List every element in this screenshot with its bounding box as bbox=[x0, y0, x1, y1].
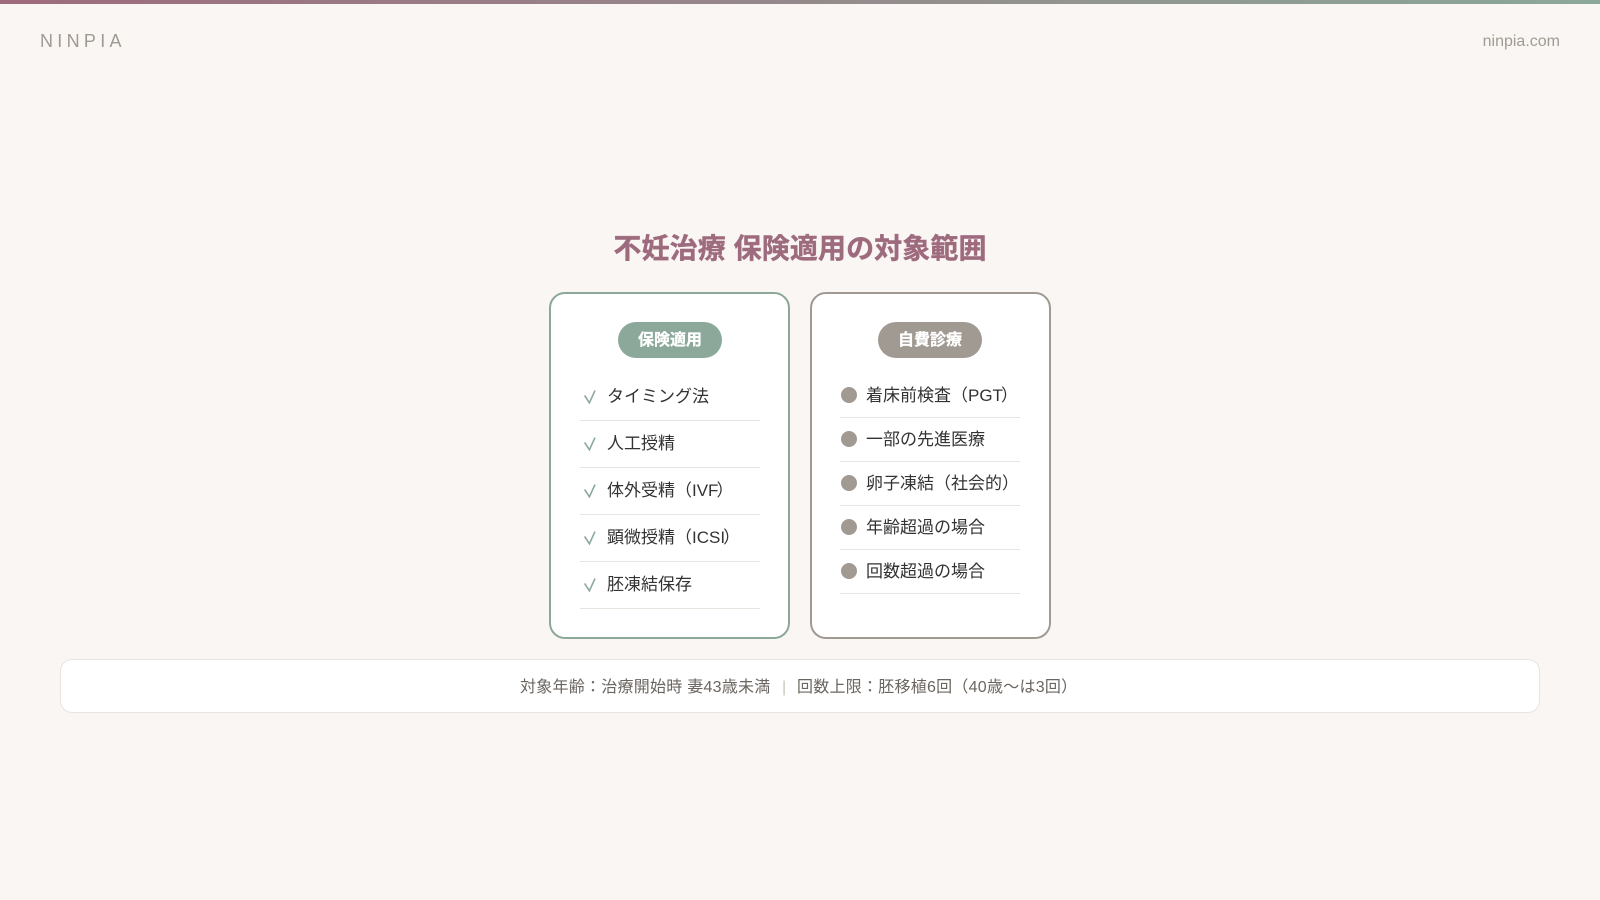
site url: ninpia.com bbox=[1483, 33, 1560, 50]
panel: insurance covered bbox=[549, 292, 790, 639]
item: artificial insemination: 人工授精 bbox=[607, 434, 675, 453]
top gradient bar bbox=[0, 0, 1600, 4]
item: ICSI bbox=[580, 515, 760, 562]
item: advanced medicine bbox=[840, 418, 1020, 462]
item: PGT bbox=[840, 374, 1020, 418]
item: over count bbox=[840, 550, 1020, 594]
item: advanced medicine: 一部の先進医療 bbox=[866, 430, 985, 449]
item: over age bbox=[840, 506, 1020, 550]
footer note: | bbox=[782, 679, 786, 696]
item: egg freezing: 卵子凍結（社会的） bbox=[866, 474, 1019, 493]
badge: insurance covered bbox=[618, 322, 722, 358]
item: embryo freezing bbox=[580, 562, 760, 609]
badge: insurance covered: 保険適用 bbox=[638, 332, 702, 349]
title: 不妊治療 保険適用の対象範囲 bbox=[613, 233, 987, 264]
item: PGT: 着床前検査（PGT） bbox=[866, 386, 1018, 405]
badge: self-pay bbox=[878, 322, 982, 358]
badge: self-pay: 自費診療 bbox=[898, 332, 962, 349]
logo: NINPIA bbox=[40, 31, 126, 51]
item: embryo freezing: 胚凍結保存 bbox=[607, 575, 692, 594]
item: IVF: 体外受精（IVF） bbox=[607, 481, 733, 500]
list: self-pay bbox=[840, 386, 1020, 594]
panel: self-pay bbox=[810, 292, 1051, 639]
footer note: 対象年齢：治療開始時 妻43歳未満 bbox=[520, 679, 770, 696]
item: over age: 年齢超過の場合 bbox=[866, 518, 985, 537]
item: over count: 回数超過の場合 bbox=[866, 562, 985, 581]
item: IVF bbox=[580, 468, 760, 515]
footer note bbox=[60, 659, 1540, 713]
item: egg freezing bbox=[840, 462, 1020, 506]
list: insurance covered bbox=[580, 387, 760, 609]
item: ICSI: 顕微授精（ICSI） bbox=[607, 528, 740, 547]
item: artificial insemination bbox=[580, 421, 760, 468]
footer note: 回数上限：胚移植6回（40歳〜は3回） bbox=[797, 679, 1077, 696]
item: timing: タイミング法 bbox=[607, 387, 709, 406]
item: timing bbox=[580, 374, 760, 421]
